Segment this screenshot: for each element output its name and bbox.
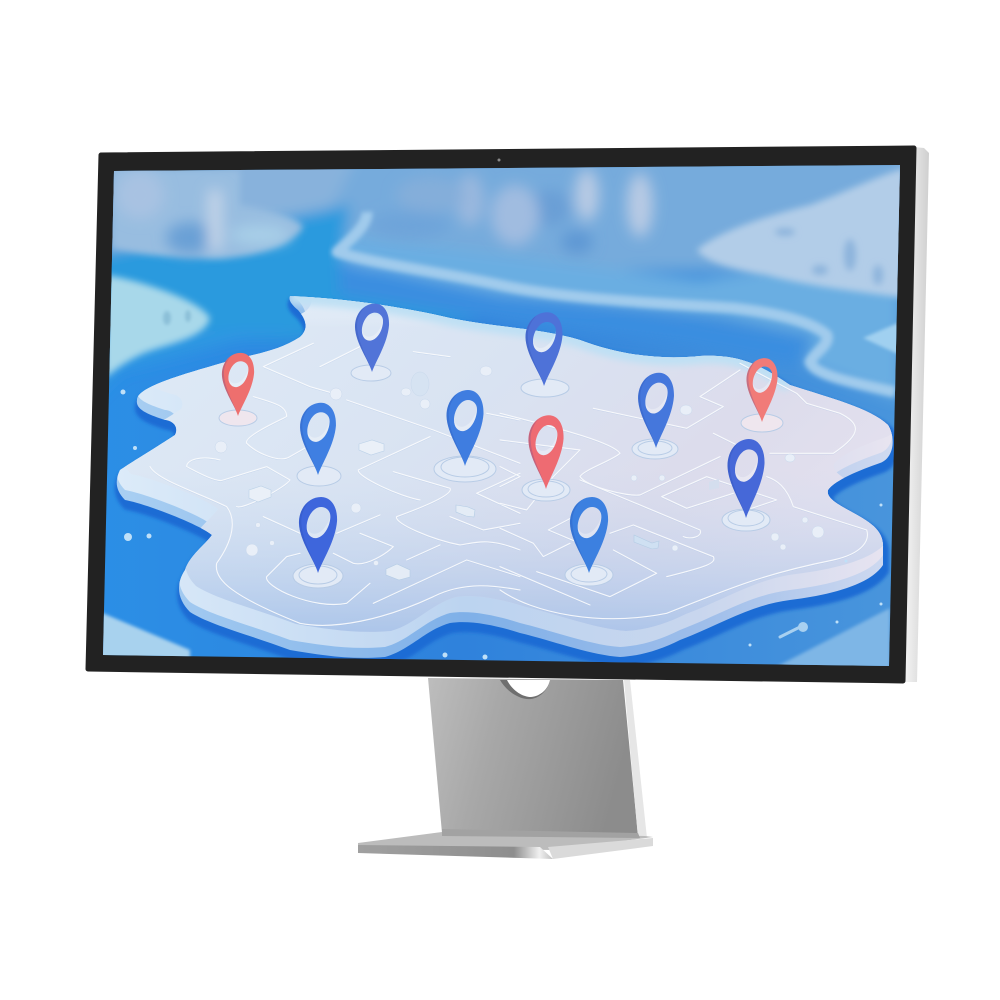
far haze <box>109 165 900 402</box>
monitor stand <box>358 678 653 859</box>
foreground land corners <box>100 608 890 670</box>
pin bases <box>219 365 783 588</box>
stand base <box>358 829 653 859</box>
terrace band <box>117 286 893 648</box>
monitor side edge <box>904 147 929 682</box>
surface shading <box>186 297 883 632</box>
illustration: desktop monitor showing a 3D map with location pins <box>86 146 929 859</box>
island <box>117 270 899 658</box>
clipped tiers <box>117 270 899 648</box>
webcam <box>498 158 500 162</box>
pin: red 2 <box>746 358 778 422</box>
monitor bezel <box>88 148 914 681</box>
pin: red 3 <box>528 415 564 489</box>
far diamond land <box>863 322 900 355</box>
top surface <box>123 270 899 632</box>
far land top-left <box>113 170 303 259</box>
pin: blue 2 <box>300 403 336 475</box>
pin: blue 6 <box>638 373 674 448</box>
far land top-right <box>697 168 905 298</box>
map objects: buildings and bumps <box>120 366 882 660</box>
dark water around island <box>119 302 895 664</box>
pin: blue 7 <box>728 439 765 518</box>
pin: blue 8 <box>570 497 608 573</box>
slab side <box>117 296 893 658</box>
pin: blue 3 <box>446 390 484 466</box>
stand edge highlight <box>624 680 647 838</box>
far shoreline strip <box>337 212 895 392</box>
road lines right <box>500 363 867 619</box>
far edge softening <box>290 296 790 385</box>
pin: red 1 <box>222 353 254 416</box>
pin: blue 1 <box>355 304 389 372</box>
far land detail spots <box>116 169 653 254</box>
small pin-shaped object in the water <box>780 622 808 637</box>
buildings <box>249 440 719 580</box>
pin: blue 5 <box>526 312 563 386</box>
stand neck <box>428 678 638 836</box>
cable hole <box>500 680 550 699</box>
pin: blue 4 <box>299 497 337 573</box>
far land left <box>105 275 210 378</box>
far land top-right spots <box>775 228 883 285</box>
left land bumps <box>163 310 191 325</box>
water droplets <box>120 390 882 660</box>
bumps <box>215 366 824 566</box>
road lines left <box>150 343 520 625</box>
screen: map scene <box>90 150 930 670</box>
water background <box>90 160 920 670</box>
